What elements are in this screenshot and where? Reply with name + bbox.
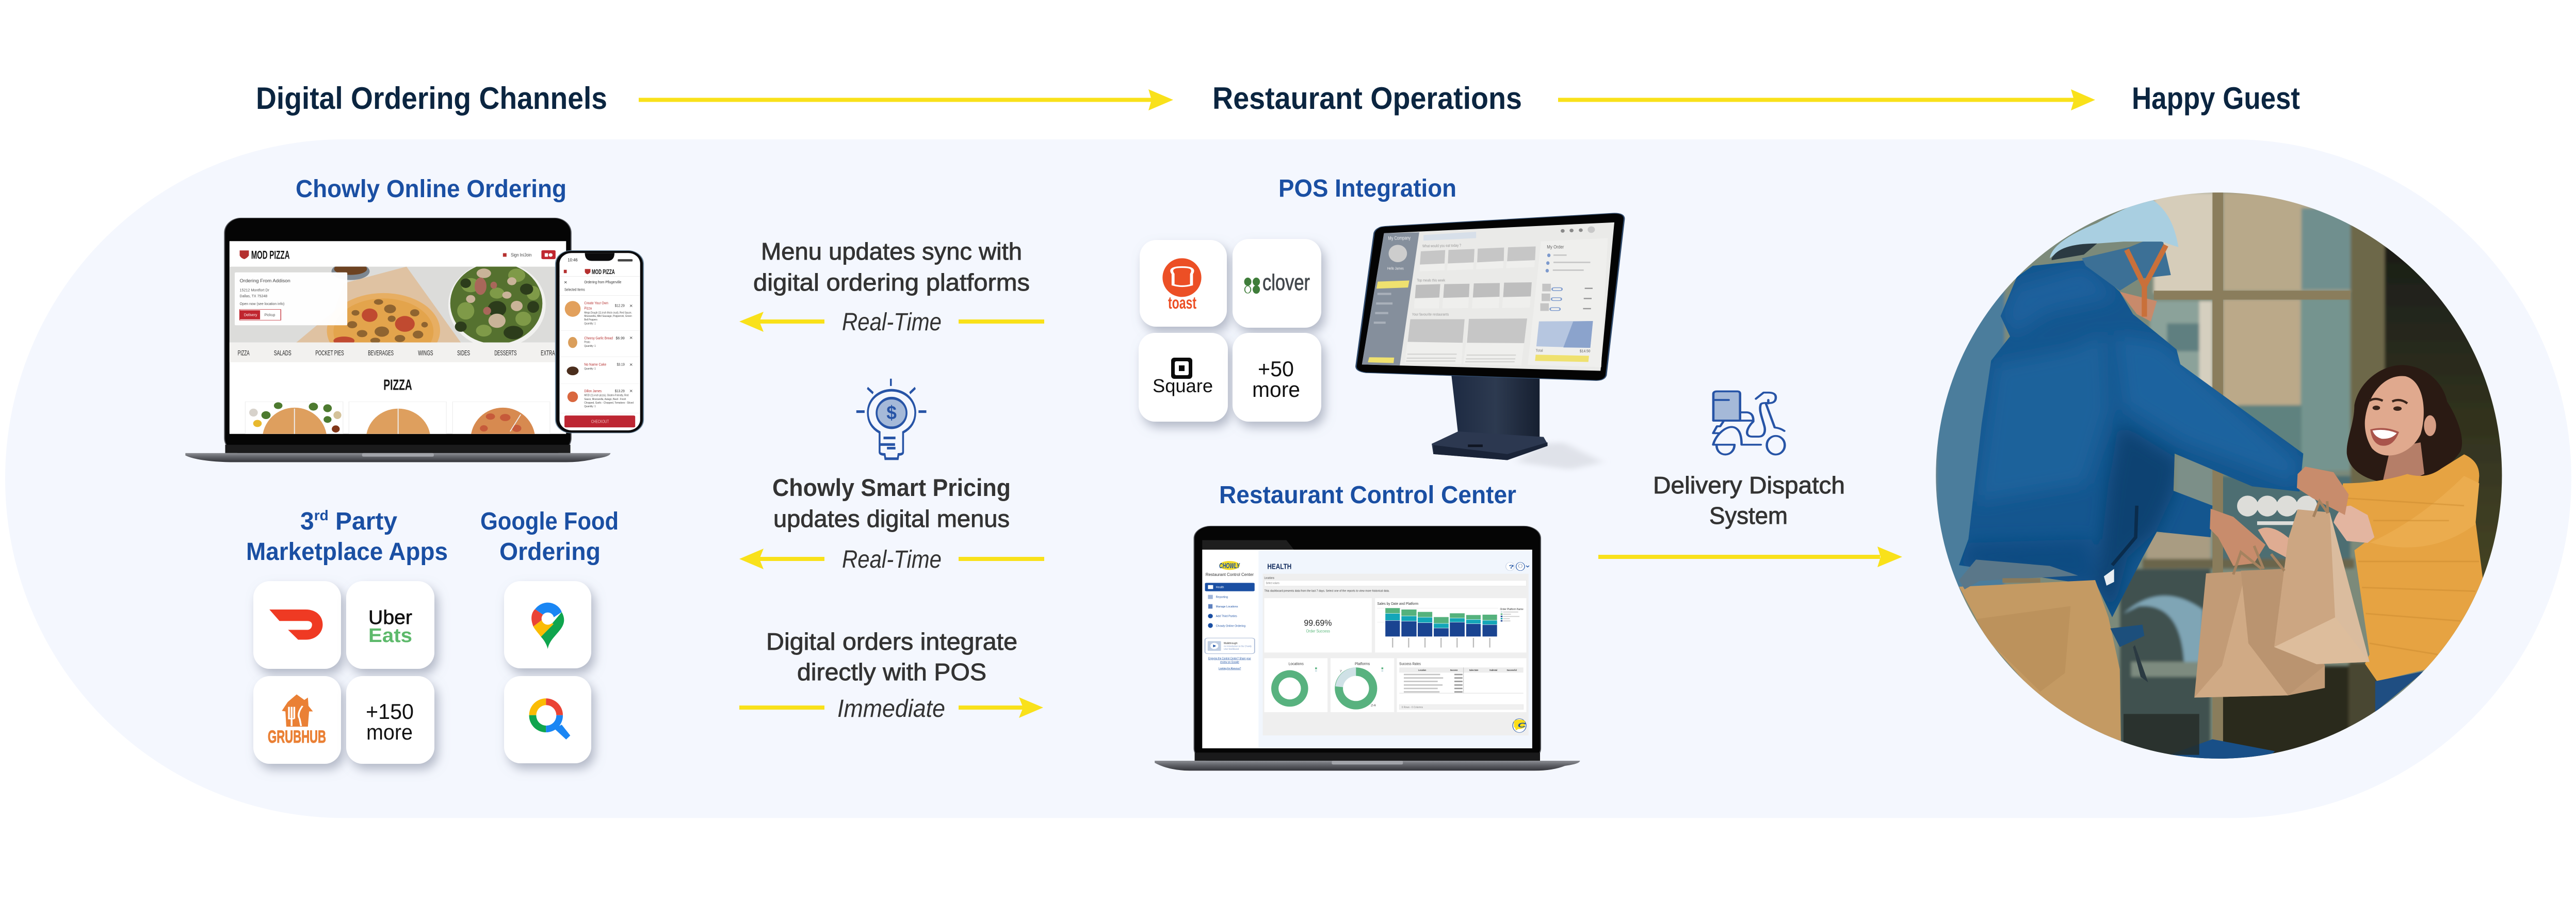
category navigation	[230, 343, 566, 362]
laptop body	[185, 218, 610, 462]
sidebar logo: CHOWLY	[1219, 562, 1240, 570]
tablet body	[1356, 213, 1624, 380]
panel: order success: Order Success	[1306, 629, 1330, 634]
phone mockup: Sauce, Mozzarella, Asiago, Basil - Fresh	[584, 397, 626, 400]
walkthrough card: Looking for Abovous?	[1219, 667, 1241, 670]
sidebar menu: Add Third Parties	[1216, 615, 1237, 618]
screen content: $14.50	[1580, 349, 1591, 354]
phone mockup: Cheesy Garlic Bread	[584, 336, 613, 341]
text: Chowly Smart Pricing	[772, 474, 1011, 532]
text: digital orders integrate	[766, 628, 1017, 685]
window frames	[2154, 193, 2351, 743]
screen content: What would you eat today ?	[1422, 244, 1462, 248]
text: Chowly Smart Pricing: updates digital menus	[773, 505, 1010, 532]
phone mockup: Pesto	[584, 341, 590, 344]
panel: locations donut	[1265, 658, 1327, 712]
phone mockup: $12.29	[615, 303, 625, 308]
icon: lightbulb with dollar: $	[886, 402, 897, 423]
card: clover	[1233, 239, 1321, 328]
category navigation: SIDES	[457, 349, 470, 357]
heading: 3rd Party Marketplace Apps: rd	[314, 507, 329, 523]
screen content: Total	[1536, 349, 1543, 353]
label: Delivery Dispatch System: Delivery Dispatch	[1653, 472, 1845, 499]
screen content: Your favourite restaurants	[1412, 312, 1449, 317]
hero image: pizza and salad	[229, 266, 555, 343]
panel: platforms donut	[1331, 658, 1394, 712]
heading: Google Food Ordering: Google Food	[480, 508, 619, 535]
phone mockup: $6.99	[616, 336, 625, 341]
icon: delivery scooter	[1713, 391, 1785, 455]
category navigation: POCKET PIES	[315, 349, 344, 357]
card: Grubhub	[253, 676, 341, 764]
screen content: Hello James	[1387, 267, 1404, 270]
top right icons	[1506, 563, 1529, 571]
phone mockup: Quantity: 1	[584, 344, 596, 347]
heading: 3rd Party Marketplace Apps: 3	[300, 508, 314, 535]
category navigation: PIZZA	[238, 349, 250, 357]
category navigation: BEVERAGES	[368, 349, 394, 357]
phone mockup: $3.19	[617, 363, 625, 367]
label: Immediate: Immediate	[837, 695, 945, 723]
card: +50 more: +50	[1258, 357, 1294, 381]
walkthrough card: review on Google	[1220, 661, 1239, 664]
tablet screen	[1362, 222, 1614, 371]
top right icons: ?	[1509, 564, 1514, 570]
heading: 3rd Party Marketplace Apps: Marketplace Apps	[246, 538, 448, 566]
window logo	[2237, 495, 2318, 525]
location filter: Locations	[1265, 576, 1274, 580]
panel: order success: 99.69%	[1304, 618, 1332, 628]
card: +50 more	[1233, 333, 1321, 422]
card: Google Search	[504, 676, 591, 763]
panel: success rates table: Success Rates	[1399, 662, 1421, 666]
laptop: control center dashboard	[1155, 526, 1580, 771]
walkthrough card: Walkthrough:	[1224, 642, 1238, 645]
phone mockup: No Name Cake	[584, 363, 606, 367]
panel: success rates table: Location	[1418, 669, 1426, 671]
card: toast	[1140, 240, 1227, 327]
phone mockup: Bell Peppers	[584, 318, 597, 322]
logo: MOD PIZZA	[240, 249, 289, 261]
card: DoorDash	[253, 581, 341, 669]
phone mockup: x	[629, 363, 633, 367]
card: Square: Square	[1153, 375, 1213, 396]
phone mockup: Mega Dough (11-inch thick crust), Red Sauce,	[584, 311, 632, 314]
category navigation: EXTRA	[541, 349, 555, 357]
card: +150 more: +150	[366, 699, 414, 724]
phone mockup: Ordering from Pflugerville	[584, 280, 621, 284]
heading: POS Integration: POS Integration	[1278, 175, 1456, 202]
screen content	[1368, 227, 1608, 367]
chat bubble	[1513, 719, 1527, 732]
card: +150 more: more	[366, 720, 413, 744]
sidebar logo	[1206, 561, 1254, 577]
phone mockup: MOD (11-inch pizza), Gluten-Friendly, Red	[584, 394, 628, 397]
walkthrough card: Enjoying the Control Center? Share your	[1208, 657, 1251, 660]
label: Delivery Dispatch System	[1653, 472, 1845, 529]
courier: belt and pants	[1959, 559, 2121, 742]
laptop body	[1155, 526, 1580, 771]
panel: sales bar chart: Order Platform Name	[1500, 607, 1524, 611]
sign in link: Sign In/Join	[511, 252, 531, 258]
phone mockup: Quantity: 1	[584, 322, 596, 325]
phone mockup: Quantity: 1	[584, 367, 596, 370]
walkthrough card: An Introduction to the Chowly	[1224, 645, 1252, 648]
panel: success rates table: Successful	[1506, 669, 1517, 671]
guest: woman	[2258, 365, 2483, 712]
phone mockup: Dillon James	[584, 389, 602, 393]
phone mockup: x	[629, 336, 633, 340]
heading: Happy Guest: Happy Guest	[2132, 81, 2300, 116]
text: digital orders integrate: Digital orders integrate	[766, 628, 1017, 655]
phone mockup: CHECKOUT	[591, 420, 609, 424]
stand shadow	[1517, 442, 1603, 470]
location card: Ordering From Addison	[240, 278, 290, 283]
card: Grubhub: GRUBHUB	[268, 727, 326, 747]
scooter handle and box	[2110, 624, 2275, 766]
arrow: channels to operations	[639, 89, 1173, 110]
phone mockup	[556, 251, 643, 433]
heading: Google Food Ordering: Ordering	[499, 538, 601, 566]
phone mockup: Selected Items	[564, 287, 585, 292]
arrow: operations to guest	[1558, 89, 2095, 110]
arrow: left real-time middle	[739, 549, 1044, 569]
location card: Open now (see location info)	[240, 302, 284, 306]
panel: success rates table: Subtotal	[1489, 669, 1497, 671]
panel: success rates table: Sales Date	[1469, 669, 1478, 671]
location card: 15212 Montfort Dr	[240, 288, 269, 293]
label: Real-Time: Real-Time	[842, 309, 942, 336]
middle text: menu updates sync: Menu updates sync with	[761, 238, 1022, 265]
laptop screen	[230, 241, 566, 434]
phone mockup: x	[629, 389, 633, 393]
screen content: Top meals this week	[1417, 278, 1445, 283]
courier: jacket	[1950, 253, 2313, 624]
location card	[235, 272, 347, 325]
middle text: menu updates sync	[753, 238, 1030, 296]
card: +150 more	[346, 676, 434, 764]
panel: sales bar chart	[1375, 598, 1527, 652]
logo cards: POS	[1139, 239, 1321, 422]
phone mockup: x	[564, 280, 567, 284]
category navigation: SALADS	[274, 349, 291, 357]
heading: Restaurant Operations: Restaurant Operations	[1212, 81, 1522, 116]
heading: Digital Ordering Channels: Digital Ordering Channels	[256, 81, 607, 116]
pizza product cards	[245, 402, 550, 434]
location card: Pickup	[264, 313, 276, 317]
heading: Restaurant Control Center: Restaurant Control Center	[1219, 482, 1516, 509]
laptop: control center dashboard: HEALTH	[1267, 563, 1291, 571]
heading: Chowly Online Ordering: Chowly Online Ordering	[296, 175, 566, 203]
phone mockup: Create Your Own	[584, 301, 608, 306]
text: digital orders integrate: directly with POS	[797, 659, 986, 685]
screen content: My Order	[1547, 245, 1564, 250]
phone mockup: $13.29	[615, 389, 625, 393]
phone mockup: MOD PIZZA	[592, 268, 615, 276]
phone mockup: Mozzarella, Mild Sausage, Pepperoni, Green	[584, 314, 632, 318]
card: Uber Eats	[346, 581, 434, 669]
phone mockup: Quantity: 1	[584, 405, 596, 408]
tablet POS terminal	[1356, 213, 1624, 470]
label: Delivery Dispatch System: System	[1709, 502, 1788, 529]
phone mockup: Chopped, Garlic - Chopped, Tomatoes - Sliced	[584, 401, 634, 404]
panel: success rates table	[1397, 658, 1527, 712]
middle text: menu updates sync: digital ordering platforms	[753, 269, 1030, 296]
sidebar menu: Health	[1216, 586, 1224, 589]
location card: Dallas, TX 75248	[240, 294, 267, 298]
walkthrough card	[1205, 638, 1255, 670]
sidebar menu: Manage Locations	[1216, 605, 1238, 608]
sidebar	[1362, 232, 1419, 365]
panel: success rates table: 6 Rows - 6 Columns	[1402, 706, 1423, 709]
laptop and phone: online ordering: PIZZA	[383, 377, 412, 393]
sidebar menu: Reporting	[1216, 595, 1228, 599]
logo cards: third party apps and google	[253, 581, 591, 764]
panel: locations donut: Locations	[1288, 662, 1304, 666]
courier: hands, helmet, beanie, strap	[2050, 199, 2348, 566]
card: Square	[1139, 333, 1228, 422]
phone mockup: 10:46	[568, 258, 578, 263]
paper bags	[2194, 501, 2370, 698]
heading: 3rd Party Marketplace Apps: Party	[329, 508, 397, 535]
card: +50 more: more	[1252, 377, 1300, 402]
photo: courier handing bags to guest	[1919, 186, 2513, 769]
screen content: My Company	[1388, 235, 1411, 242]
arrow: left real-time top	[739, 312, 1044, 332]
category navigation: WINGS	[418, 349, 433, 357]
location filter: This dashboard presents data from the last 7 days. Select one of the reports to view more historical data.	[1265, 589, 1389, 592]
walkthrough card: User Dashboard	[1224, 648, 1239, 650]
stand	[1432, 375, 1548, 460]
card: Uber Eats: Uber	[368, 607, 412, 629]
background panel	[5, 139, 2571, 818]
phone mockup: Pizza	[584, 306, 592, 310]
arrow: dispatch to guest	[1598, 547, 1902, 567]
card: Google Maps	[504, 581, 591, 668]
card: Uber Eats: Eats	[368, 625, 412, 647]
panel: platforms donut: 24	[1370, 704, 1376, 707]
sign in link	[503, 250, 556, 259]
panel: sales bar chart: Sales by Date and Platform	[1377, 602, 1418, 606]
sidebar logo: Restaurant Control Center	[1206, 573, 1254, 577]
location filter	[1265, 576, 1527, 592]
chat bubble: C	[1518, 721, 1527, 729]
panel: order success	[1265, 598, 1372, 652]
text: Chowly Smart Pricing: Chowly Smart Pricing	[772, 474, 1011, 501]
panel: platforms donut: 7	[1339, 669, 1342, 673]
category navigation: DESSERTS	[494, 349, 517, 357]
panel: success rates table: Success	[1450, 669, 1458, 671]
building and window background	[1919, 186, 2513, 769]
card: clover: clover	[1262, 270, 1310, 295]
laptop and phone: online ordering	[185, 218, 643, 471]
sidebar menu: Chowly Online Ordering	[1216, 624, 1245, 628]
panel: platforms donut: Platforms	[1355, 662, 1370, 666]
icon: lightbulb with dollar	[856, 379, 927, 459]
location card: Delivery	[244, 313, 257, 317]
arrow: right immediate	[739, 697, 1043, 718]
card: toast: toast	[1168, 293, 1196, 312]
screen	[1202, 550, 1532, 748]
label: Real-Time second: Real-Time	[842, 546, 942, 573]
laptop and phone: online ordering: MOD PIZZA	[251, 249, 289, 261]
phone mockup: x	[629, 303, 633, 308]
location filter: Select values	[1266, 582, 1279, 585]
heading: Google Food Ordering	[480, 508, 619, 566]
sidebar menu	[1205, 583, 1255, 628]
